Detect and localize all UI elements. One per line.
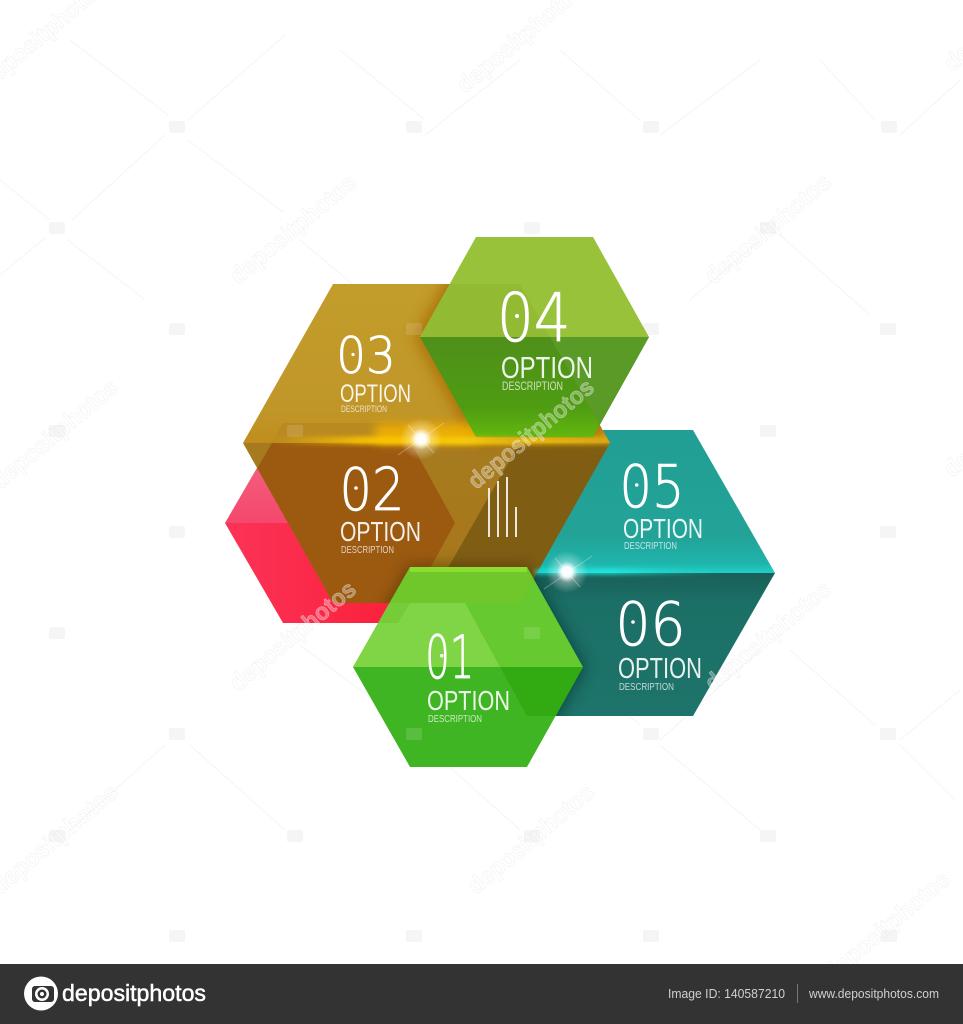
panel: red hexagon	[225, 423, 455, 623]
image id: Image ID: 140587210	[668, 987, 785, 1001]
text: 06 option	[616, 591, 702, 693]
text: 04 option: 04	[497, 279, 570, 357]
text: 05 option: 05	[620, 453, 684, 521]
depositphotos text watermarks: depositphotos	[819, 866, 956, 987]
text: 02 option: 02	[340, 456, 404, 524]
text: 02 option	[340, 456, 421, 556]
depositphotos text watermarks: depositphotos	[463, 374, 600, 495]
text: 04 option: OPTION	[501, 350, 593, 385]
depositphotos text watermarks: depositphotos	[700, 576, 837, 697]
text: 02 option: OPTION	[340, 516, 421, 547]
text: 05 option: OPTION	[623, 513, 703, 544]
text: 03 option: DESCRIPTION	[341, 404, 387, 415]
text: 01 option: 01	[425, 624, 474, 693]
light flare: teal	[535, 551, 725, 593]
text: 03 option	[336, 327, 411, 415]
icon: camera logo	[24, 976, 58, 1010]
website url: www.depositphotos.com	[808, 987, 939, 1001]
text: 01 option	[425, 624, 510, 725]
text: 06 option: 06	[616, 591, 686, 660]
panel: teal hexagon	[534, 430, 775, 716]
text: 01 option: DESCRIPTION	[428, 713, 482, 725]
footer bar	[0, 964, 963, 1024]
text: 05 option: DESCRIPTION	[624, 540, 677, 552]
text: 04 option: DESCRIPTION	[502, 381, 563, 393]
text: 06 option: OPTION	[618, 653, 702, 685]
text: 03 option: OPTION	[340, 380, 411, 408]
depositphotos text watermarks: depositphotos	[463, 779, 600, 900]
panel: green hexagon 04	[420, 237, 649, 437]
text: 05 option	[620, 453, 703, 552]
depositphotos text watermarks: depositphotos	[225, 169, 362, 290]
text: 01 option: OPTION	[427, 685, 510, 716]
depositphotos text watermarks: depositphotos	[225, 576, 362, 697]
footer logo wordmark: depositphotos	[62, 980, 206, 1006]
camera watermarks on panels	[287, 323, 540, 740]
text: 04 option	[497, 279, 593, 393]
text: 03 option: 03	[336, 327, 396, 385]
text: 02 option: DESCRIPTION	[341, 544, 394, 556]
light flare: gold	[345, 418, 520, 460]
camera watermarks	[49, 121, 897, 942]
depositphotos text watermarks: depositphotos	[700, 169, 837, 290]
bar icon	[489, 477, 516, 537]
text: 06 option: DESCRIPTION	[619, 681, 674, 693]
panel: gold hexagon	[243, 284, 610, 603]
panel: green hexagon 01	[353, 567, 583, 767]
